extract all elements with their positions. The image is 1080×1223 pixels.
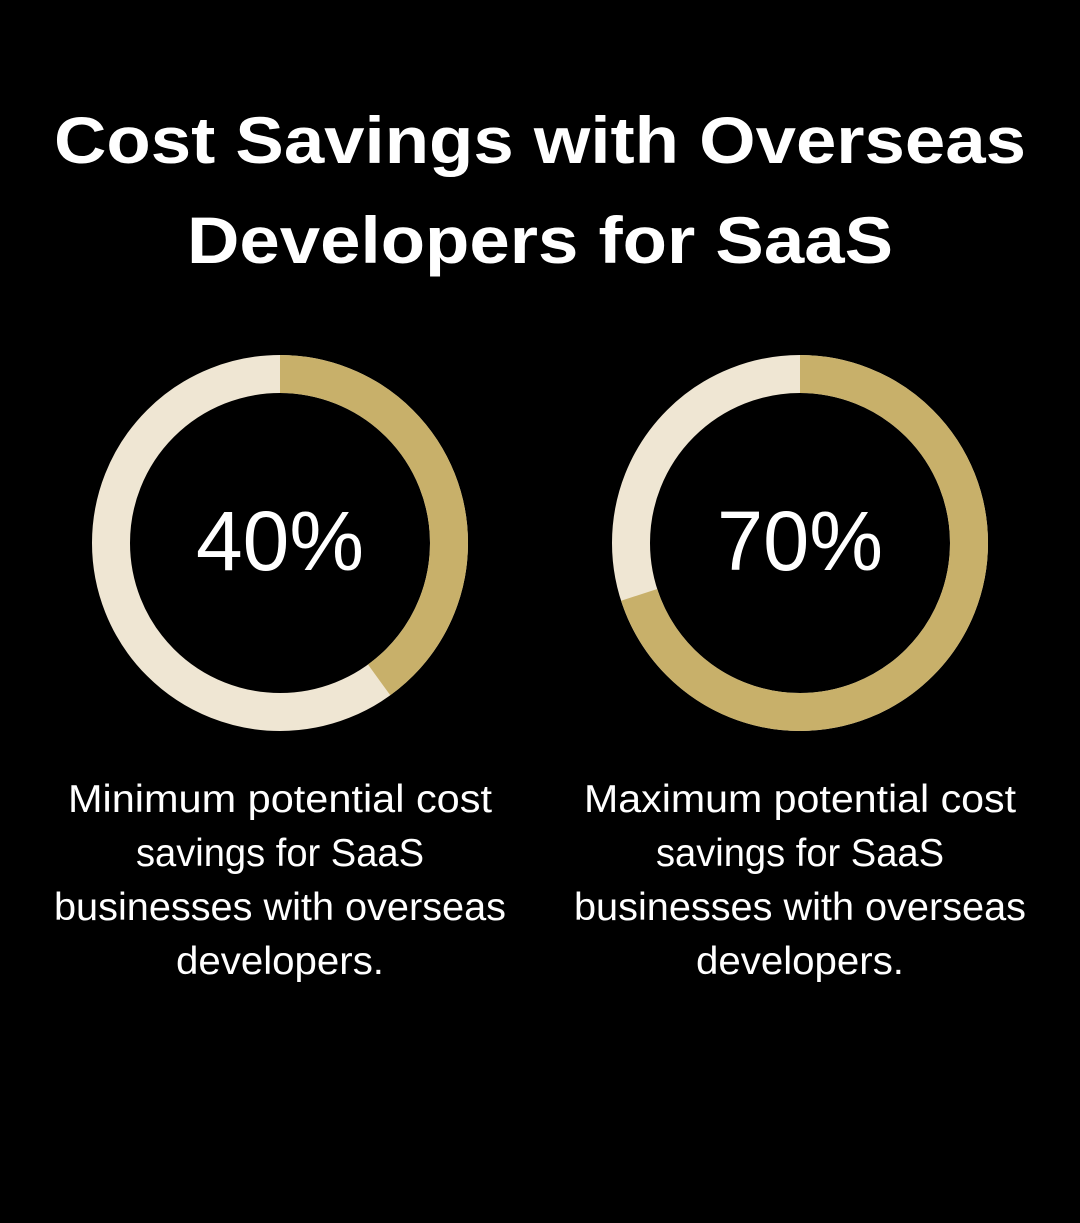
text block: maximum savings: Maximum potential cost [584, 778, 1016, 821]
text block: maximum savings: businesses with overseas [574, 886, 1026, 929]
title [54, 103, 1026, 277]
text block: maximum savings: savings for SaaS [656, 832, 944, 875]
donut chart: 40% [111, 374, 449, 712]
text block: minimum savings: Minimum potential cost [68, 778, 492, 821]
text block: minimum savings: savings for SaaS [136, 832, 424, 875]
title: Developers for SaaS [187, 203, 893, 277]
text block: minimum savings: businesses with overseas [54, 886, 506, 929]
title: Cost Savings with Overseas [54, 103, 1026, 177]
donut chart: 70% [631, 374, 969, 712]
donut chart: 70%: 70% [717, 494, 883, 588]
text block: minimum savings: developers. [176, 940, 384, 983]
text block: maximum savings: developers. [696, 940, 904, 983]
text block: minimum savings [54, 778, 506, 983]
donut chart: 40%: 40% [196, 494, 364, 588]
text block: maximum savings [574, 778, 1026, 983]
